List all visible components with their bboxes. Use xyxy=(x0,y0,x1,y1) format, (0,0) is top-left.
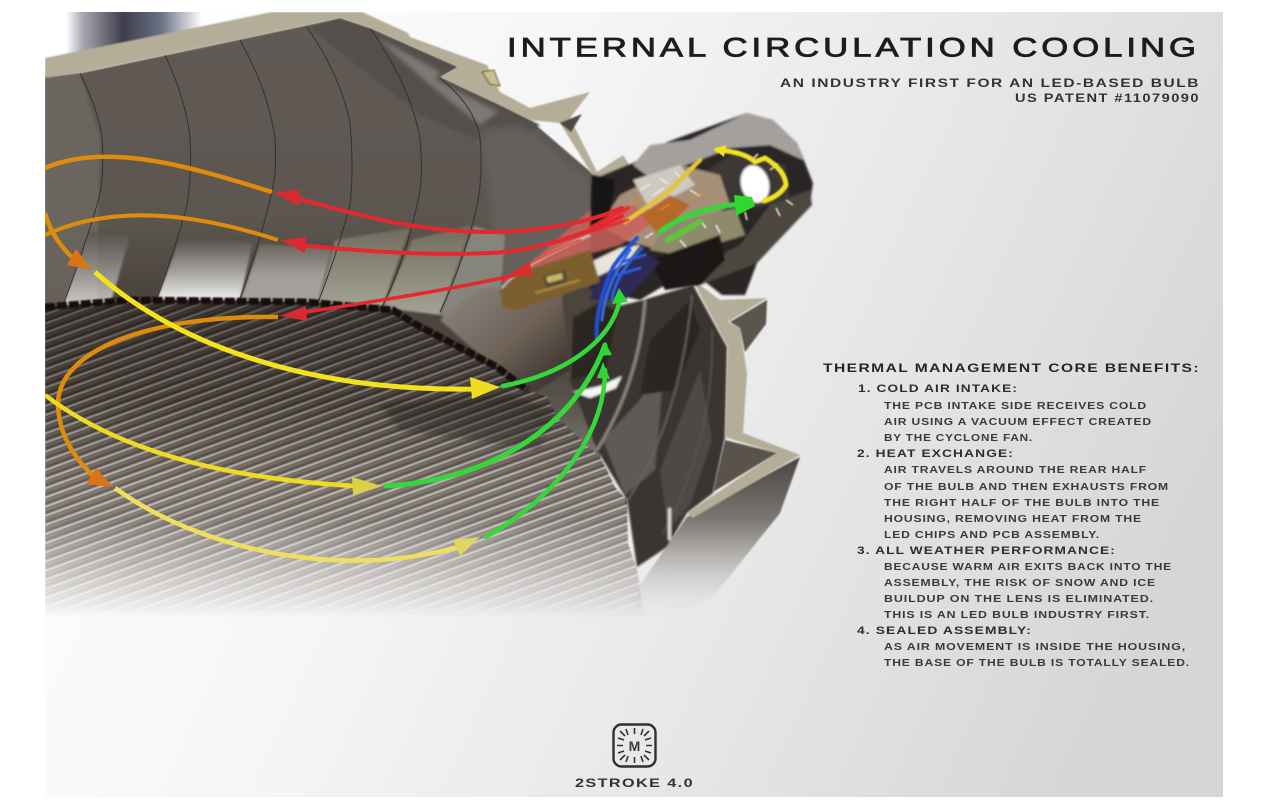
outer reflector cup xyxy=(639,456,801,598)
benefit 2: AIR TRAVELS AROUND THE REAR HALF xyxy=(884,465,1147,476)
green arrowheads xyxy=(597,288,628,379)
benefit 2: HOUSING, REMOVING HEAT FROM THE xyxy=(884,514,1142,525)
ribs xyxy=(63,27,481,312)
benefit 3: THIS IS AN LED BULB INDUSTRY FIRST. xyxy=(884,610,1150,621)
logo: M chip icon xyxy=(614,724,656,766)
bolt detail on wall xyxy=(482,70,500,86)
heat sink fins xyxy=(45,300,645,622)
green airflow xyxy=(386,300,620,537)
benefit 1: AIR USING A VACUUM EFFECT CREATED xyxy=(884,417,1152,428)
lower housing wall cross-section xyxy=(687,280,800,518)
arrowhead: yellow in bulb xyxy=(714,145,726,157)
benefit 4: THE BASE OF THE BULB IS TOTALLY SEALED. xyxy=(884,658,1190,669)
benefit 1: THE PCB INTAKE SIDE RECEIVES COLD xyxy=(884,401,1147,412)
subtitle: US PATENT #11079090 xyxy=(1015,91,1200,105)
housing wall cross-section xyxy=(45,12,634,182)
cyclone fan and bulb socket xyxy=(570,285,727,567)
benefit 3: BUILDUP ON THE LENS IS ELIMINATED. xyxy=(884,594,1154,605)
benefit 2: LED CHIPS AND PCB ASSEMBLY. xyxy=(884,530,1100,541)
circuit sparkle details xyxy=(630,154,793,247)
bulb assembly xyxy=(500,113,813,310)
benefit 3: BECAUSE WARM AIR EXITS BACK INTO THE xyxy=(884,562,1172,573)
benefit 1: 1. COLD AIR INTAKE: xyxy=(858,383,1018,395)
product name: 2STROKE 4.0 xyxy=(575,778,694,790)
benefit 4: 4. SEALED ASSEMBLY: xyxy=(857,625,1032,637)
illustration: cutaway headlight housing xyxy=(45,0,813,625)
red return airflow xyxy=(295,198,622,313)
benefit 4 xyxy=(857,625,1190,669)
benefit 2: OF THE BULB AND THEN EXHAUSTS FROM xyxy=(884,482,1169,493)
logo: M chip icon: M xyxy=(629,738,640,754)
arrowhead: green in bulb xyxy=(734,195,755,216)
glass and circuitry xyxy=(600,165,730,250)
yellow arrowheads xyxy=(352,377,500,556)
benefit 2: 2. HEAT EXCHANGE: xyxy=(857,448,1014,460)
benefit 1: BY THE CYCLONE FAN. xyxy=(884,433,1033,444)
benefit 4: AS AIR MOVEMENT IS INSIDE THE HOUSING, xyxy=(884,642,1186,653)
arrowhead: red at PCB loop xyxy=(512,262,532,278)
benefit 1 xyxy=(858,383,1152,444)
reflective strips xyxy=(63,232,130,306)
benefit 3: ASSEMBLY, THE RISK OF SNOW AND ICE xyxy=(884,578,1156,589)
orange arrowheads xyxy=(67,249,113,487)
chrome reflection above housing xyxy=(66,0,202,60)
benefits heading: THERMAL MANAGEMENT CORE BENEFITS: xyxy=(823,361,1200,375)
yellow airflow xyxy=(45,272,475,561)
reflector inner shade xyxy=(713,440,777,492)
housing interior xyxy=(45,18,620,460)
dark notch xyxy=(560,114,582,132)
orange airflow xyxy=(45,157,278,482)
benefit 2: THE RIGHT HALF OF THE BULB INTO THE xyxy=(884,498,1160,509)
PCB arm xyxy=(500,250,600,310)
subtitle xyxy=(780,76,1200,105)
title: INTERNAL CIRCULATION COOLING xyxy=(507,32,1200,62)
airflow arrows inside bulb xyxy=(504,150,786,340)
benefit 3 xyxy=(857,545,1172,621)
red arrowheads xyxy=(273,190,307,321)
spur shadow xyxy=(730,300,767,352)
benefit 3: 3. ALL WEATHER PERFORMANCE: xyxy=(857,545,1116,557)
benefit 2 xyxy=(857,448,1169,541)
subtitle: AN INDUSTRY FIRST FOR AN LED-BASED BULB xyxy=(780,76,1200,90)
benefits text block xyxy=(823,361,1200,669)
